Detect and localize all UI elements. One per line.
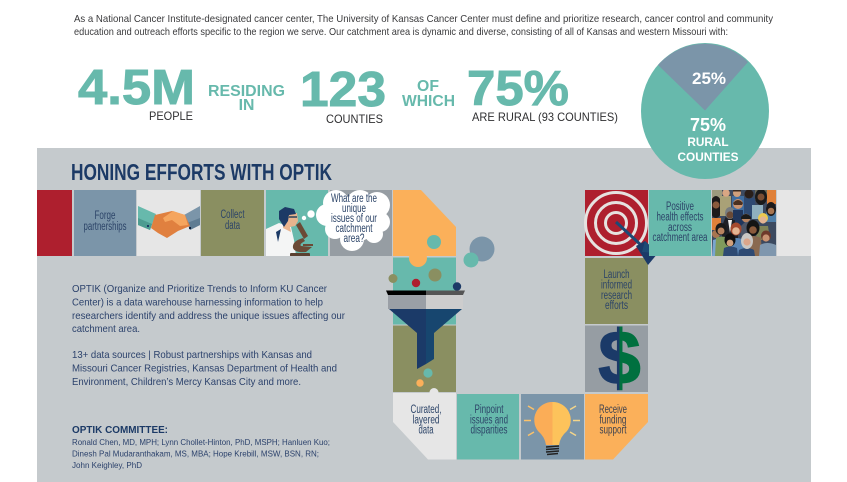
connector: residing in [208, 83, 285, 114]
connector: of which: OF [417, 78, 439, 95]
intro paragraph: education and outreach efforts specific to the region we serve. Our catchment area is dynamic and diverse, consisting of all of Kansas and western Missouri with: [74, 27, 728, 38]
intro paragraph: As a National Cancer Institute-designated cancer center, The University of Kansas Cancer Center must define and prioritize research, cancer control and community [74, 14, 774, 25]
stat: 123 counties: 123 [300, 63, 386, 117]
stat: 75% rural: 75% [467, 62, 569, 116]
connector: residing in: IN [239, 97, 254, 114]
tile: pinpoint issues and disparities [457, 394, 519, 460]
tile: handshake icon [137, 190, 200, 256]
tile: positive health effects: health effects [656, 212, 704, 224]
tile: pinpoint issues and disparities: issues and [470, 414, 508, 426]
tile: receive funding support: Receive [599, 404, 627, 416]
intro paragraph [74, 14, 774, 38]
stat: 4.5M people: PEOPLE [149, 110, 193, 123]
tile: curated layered data: data [418, 424, 434, 436]
tile: curated layered data: Curated, [410, 404, 442, 416]
text block: data sources [72, 350, 337, 388]
funnel illustration with data dots [386, 235, 494, 387]
thought bubble: What are the [331, 193, 377, 205]
connector: residing in: RESIDING [208, 83, 285, 100]
tile: launch informed research efforts: Launch [604, 269, 630, 281]
thought bubble: area? [344, 233, 364, 245]
tile: olive funnel tile [393, 326, 456, 392]
tile: forge partnerships: Forge [94, 210, 116, 222]
tile: launch informed research efforts: research [601, 290, 632, 302]
tile: forge partnerships [74, 190, 136, 256]
text block: OPTIK committee [72, 425, 330, 470]
tile: receive funding support [585, 394, 648, 460]
heading: HONING EFFORTS WITH OPTIK [71, 159, 332, 185]
pie chart: rural counties: 25% [692, 69, 726, 88]
tile: launch informed research efforts: informed [601, 280, 632, 292]
tile: pinpoint issues and disparities: Pinpoint [474, 404, 504, 416]
tile: dollar sign icon: $ [598, 316, 641, 401]
text block: OPTIK description: Center) is a data warehouse harnessing information to help [72, 298, 323, 308]
thought bubble: issues of our [331, 213, 377, 225]
text block: OPTIK description: researchers identify and address the unique issues affecting our [72, 311, 345, 322]
tile: scientist with microscope [266, 190, 328, 256]
stat: 4.5M people: 4.5M [78, 61, 195, 115]
text block: OPTIK committee: Ronald Chen, MD, MPH; Lynn Chollet-Hinton, PhD, MSPH; Hanluen Kuo; [72, 437, 330, 447]
tile: receive funding support: support [600, 424, 627, 436]
tile: collect data: data [225, 220, 240, 232]
tile: positive health effects: catchment area [652, 232, 708, 244]
thought bubble: unique [342, 203, 366, 215]
front row [712, 220, 776, 256]
connector: of which: WHICH [402, 93, 455, 110]
tile: collect data [201, 190, 264, 256]
tile: forge partnerships: partnerships [84, 221, 127, 233]
text block: data sources: Missouri Cancer Registries, Kansas Department of Health and [72, 364, 337, 374]
stat: 123 counties: COUNTIES [326, 113, 383, 126]
tile: receive funding support: funding [600, 414, 626, 426]
panel: honing efforts background [37, 148, 811, 482]
tile: collect data: Collect [220, 209, 245, 221]
tile: blank end [777, 190, 811, 256]
tile: red start [37, 190, 72, 256]
stat: 75% rural [467, 62, 618, 124]
middle row [722, 199, 770, 240]
tile: curated layered data [393, 388, 456, 460]
text block: OPTIK committee: OPTIK COMMITTEE: [72, 425, 168, 436]
text block: OPTIK committee: Dinesh Pal Mudaranthakam, MS, MBA; Hope Krebill, MSW, BSN, RN; [72, 448, 319, 458]
thought bubble [302, 190, 390, 251]
tile: teal funnel tile [393, 258, 456, 324]
tile: orange cut corner [393, 190, 456, 256]
text block: OPTIK description: OPTIK (Organize and Prioritize Trends to Inform KU Cancer [72, 284, 327, 295]
pie chart: rural counties: COUNTIES [678, 150, 739, 164]
tile: crowd of people [710, 189, 776, 256]
tile: launch informed research efforts: efforts [605, 300, 628, 312]
text block: OPTIK description [72, 284, 345, 335]
tile: positive health effects: Positive [666, 201, 694, 213]
stats row [78, 61, 618, 126]
pie chart: rural counties [641, 43, 769, 179]
tile: launch informed research efforts [585, 258, 648, 324]
tile: positive health effects [649, 190, 711, 256]
pie chart: rural counties: 75% [690, 115, 726, 135]
microscope [296, 222, 308, 239]
pie chart: rural counties: RURAL [687, 135, 729, 149]
text block: data sources: Environment, Children’s Mercy Kansas City and more. [72, 377, 301, 388]
text block: data sources: 13+ data sources | Robust partnerships with Kansas and [72, 350, 312, 361]
tile: positive health effects: across [668, 222, 692, 234]
tile: dollar sign icon [585, 326, 648, 392]
stat: 75% rural: ARE RURAL (93 COUNTIES) [472, 111, 618, 124]
tile: light bulb icon [521, 394, 584, 460]
back row [710, 189, 776, 222]
tile: curated layered data: layered [412, 414, 440, 426]
connector: of which [402, 78, 455, 110]
text block: OPTIK description: catchment area. [72, 324, 140, 335]
lab coat [266, 223, 296, 256]
tile: dollar sign icon: $ [598, 316, 641, 401]
tile: grey behind thought bubble [330, 190, 392, 256]
tile: target with arrow [585, 190, 658, 265]
tile: pinpoint issues and disparities: disparities [470, 424, 508, 436]
thought bubble: catchment [336, 223, 373, 235]
text block: OPTIK committee: John Keighley, PhD [72, 460, 142, 470]
